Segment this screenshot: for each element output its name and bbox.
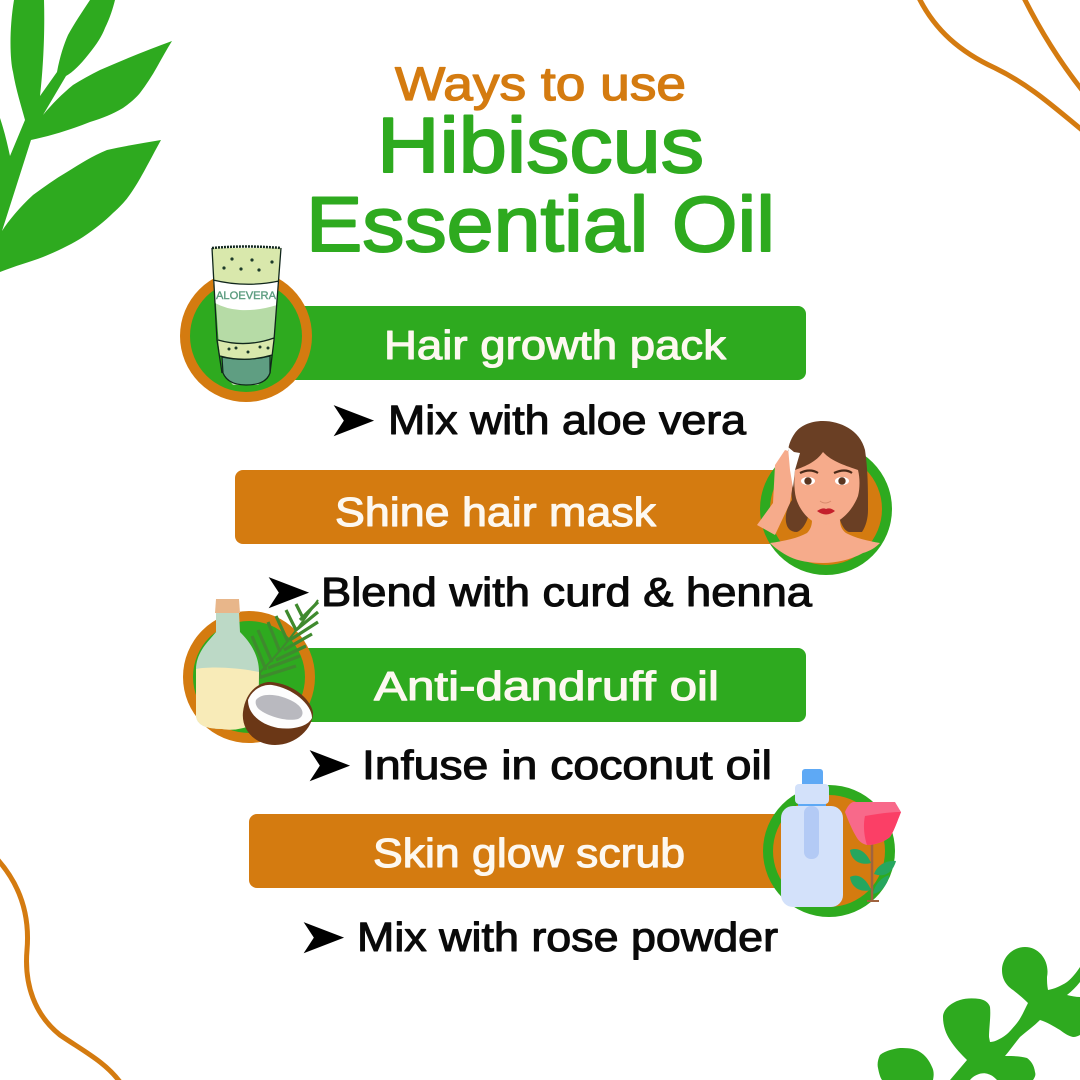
banner: skin glow scrub bbox=[249, 814, 789, 888]
panel: shine hair mask bbox=[235, 421, 892, 575]
tip: mix with rose powder bbox=[297, 908, 778, 965]
tube label: ALOEVERA bbox=[216, 290, 277, 302]
icon: oil bottle with coconut bbox=[183, 599, 318, 745]
tip: blend with curd and henna: ➤ bbox=[262, 563, 312, 620]
banner: anti-dandruff oil bbox=[285, 648, 806, 722]
panel: skin glow scrub bbox=[249, 769, 901, 917]
panel: hair growth pack bbox=[180, 246, 806, 402]
tip: mix with rose powder: Mix with rose powder bbox=[357, 914, 778, 960]
label: hair growth pack: Hair growth pack bbox=[384, 322, 727, 368]
tip: infuse in coconut oil: Infuse in coconut oil bbox=[362, 742, 772, 788]
title line: Ways to use: Ways to use bbox=[395, 57, 686, 110]
label: anti-dandruff oil: Anti-dandruff oil bbox=[374, 663, 719, 709]
icon: woman applying mask bbox=[757, 421, 892, 575]
tip: mix with aloe vera: ➤ bbox=[327, 391, 377, 448]
panel: anti-dandruff oil bbox=[183, 599, 806, 745]
tip: infuse in coconut oil bbox=[303, 736, 772, 793]
curve decoration: top right bbox=[919, 0, 1080, 130]
leaf decoration: top left bbox=[0, 0, 172, 272]
tip: infuse in coconut oil: ➤ bbox=[303, 736, 353, 793]
label: shine hair mask: Shine hair mask bbox=[335, 489, 657, 535]
title line: Essential Oil: Essential Oil bbox=[306, 180, 775, 268]
label: skin glow scrub: Skin glow scrub bbox=[373, 830, 685, 876]
tip: mix with aloe vera: Mix with aloe vera bbox=[388, 397, 746, 443]
tip: mix with aloe vera bbox=[327, 391, 746, 448]
title bbox=[306, 57, 775, 268]
banner: hair growth pack bbox=[280, 306, 806, 380]
icon: aloe vera tube bbox=[180, 246, 312, 402]
tip: mix with rose powder: ➤ bbox=[297, 908, 347, 965]
leaf decoration: bottom right bbox=[878, 947, 1080, 1080]
icon: bottle and rose bbox=[763, 769, 901, 917]
tip: blend with curd and henna: Blend with curd & henna bbox=[321, 569, 812, 615]
curve decoration: bottom left bbox=[0, 860, 120, 1080]
tip: blend with curd and henna bbox=[262, 563, 812, 620]
banner: shine hair mask bbox=[235, 470, 795, 544]
title line: Hibiscus: Hibiscus bbox=[377, 101, 704, 189]
